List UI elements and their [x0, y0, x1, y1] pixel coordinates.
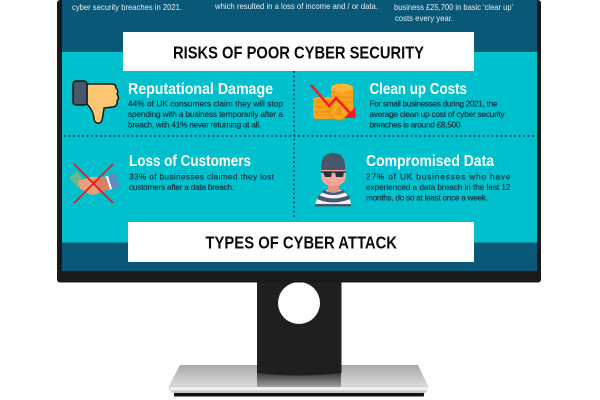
body text: 27% of UK businesses who have: [366, 172, 511, 182]
heading: Reputational Damage: [128, 81, 273, 98]
top text fragments: [72, 1, 513, 23]
body text: [366, 172, 511, 202]
body text: breaches is around £8,500.: [370, 120, 462, 130]
panel: loss of customers: [69, 153, 275, 203]
top text fragments: business £25,700 in basic 'clear up': [394, 2, 513, 12]
body text: 33% of businesses claimed they lost: [129, 172, 275, 182]
heading: risks of poor cyber security: RISKS OF POOR CYBER SECURITY: [173, 42, 424, 62]
icon: thumbs down: [73, 81, 118, 123]
panel: clean up costs: [311, 81, 505, 130]
top text fragments: cyber security breaches in 2021.: [72, 2, 182, 12]
body text: [128, 98, 283, 130]
heading: risks of poor cyber security: [123, 32, 474, 71]
icon: coins with falling arrow: [311, 84, 356, 120]
top text fragments: which resulted in a loss of income and / or data.: [214, 1, 378, 11]
heading: types of cyber attack: TYPES OF CYBER ATTACK: [206, 232, 397, 252]
heading: Compromised Data: [366, 153, 494, 170]
heading: Loss of Customers: [129, 153, 251, 170]
body text: 44% of UK consumers claim they will stop: [128, 98, 283, 108]
body text: breach, with 41% never returning at all.: [128, 120, 261, 130]
monitor stand: [169, 280, 428, 396]
body text: For small businesses during 2021, the: [370, 98, 498, 108]
panel: compromised data: [315, 153, 511, 206]
body text: customers after a data breach.: [129, 182, 234, 192]
dotted dividers: [65, 72, 536, 218]
screen: [62, 0, 537, 271]
body text: experienced a data breach in the last 12: [366, 182, 511, 192]
heading: types of cyber attack: [128, 222, 474, 262]
top text fragments: costs every year.: [395, 13, 453, 23]
body text: [370, 98, 505, 130]
icon: coins with falling arrow: $: [336, 106, 342, 118]
icon: crossed out handshake: [69, 164, 120, 203]
icon: masked thief: [315, 153, 351, 206]
monitor bezel: [57, 0, 541, 282]
heading: Clean up Costs: [370, 81, 467, 98]
body text: [129, 172, 275, 192]
panel: reputational damage: [73, 81, 283, 130]
body text: spending with a business temporarily after a: [128, 109, 283, 119]
body text: average clean up cost of cyber security: [370, 109, 505, 119]
body text: months, do so at least once a week.: [366, 192, 488, 202]
